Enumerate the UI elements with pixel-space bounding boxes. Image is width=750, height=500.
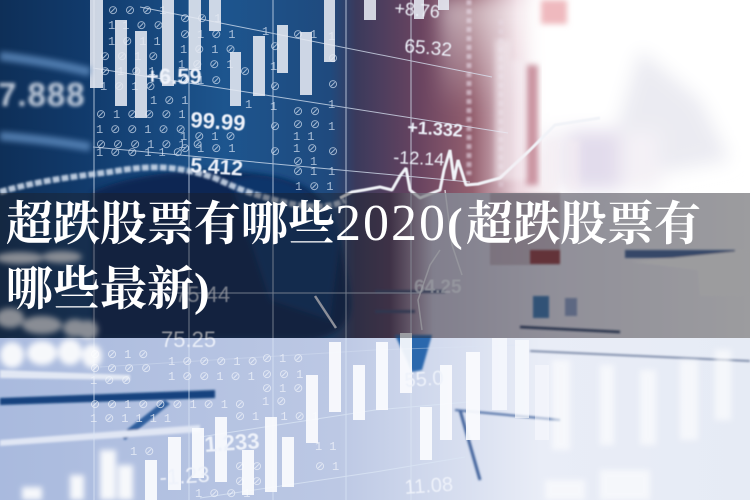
data numbers: -1.23 xyxy=(159,462,210,490)
binary digit columns upper: ⊘1⊘ xyxy=(180,74,228,88)
data numbers: +6.59 xyxy=(146,64,202,89)
binary digit columns upper: ⊘1 xyxy=(293,28,324,42)
blurred number at left: 7.888 xyxy=(0,76,86,113)
blurred red panel xyxy=(526,65,538,185)
binary digit columns upper: ⊘1⊘1 xyxy=(180,142,243,156)
binary digit columns upper: 11⊘⊘ xyxy=(108,19,171,33)
binary digits lower: ⊘⊘ xyxy=(235,475,269,489)
binary digits lower: ⊘⊘1⊘ xyxy=(90,348,155,362)
binary digits lower: 11 xyxy=(315,440,343,454)
binary digit columns upper: ⊘1⊘1 xyxy=(180,28,243,42)
binary digits lower: 1⊘ xyxy=(262,395,293,409)
title line 1: 超跌股票有哪些2020(超跌股票有 xyxy=(6,195,701,252)
title line 2: 哪些最新) xyxy=(6,264,210,316)
white translucent bars lower xyxy=(145,333,549,500)
binary digit columns upper: ⊘ xyxy=(270,145,287,159)
binary digit columns upper: 1 xyxy=(270,100,284,114)
binary digit columns upper: ⊘⊘ xyxy=(293,118,327,132)
binary digits lower: ⊘⊘ xyxy=(235,460,269,474)
title band xyxy=(0,193,750,338)
binary digit columns upper: ⊘⊘ xyxy=(293,105,327,119)
binary digit columns upper: 1 xyxy=(328,30,342,44)
binary digits lower: 1⊘⊘1⊘1 xyxy=(168,370,262,384)
binary digit columns upper: ⊘ xyxy=(270,40,287,54)
binary digit columns upper: ⊘1 xyxy=(293,155,324,169)
upper photo background xyxy=(0,0,750,340)
binary digits lower: 1⊘⊘ xyxy=(90,374,138,388)
data numbers: 55.0 xyxy=(404,367,444,392)
binary digit columns upper: 1 xyxy=(270,60,284,74)
blurred light streaks left xyxy=(0,56,90,147)
blue shapes on the lower desk xyxy=(0,335,750,480)
binary digit columns upper: ⊘ xyxy=(240,65,257,79)
binary digits lower: ⊘⊘1⊘⊘⊘1⊘1⊘ xyxy=(90,398,252,412)
binary digit columns upper: 11 xyxy=(293,130,321,144)
binary digits lower: 1⊘1111 xyxy=(90,412,178,426)
data numbers: 75.25 xyxy=(161,327,216,352)
data numbers: -12.14 xyxy=(393,147,445,170)
binary digit columns upper: 1 xyxy=(245,98,259,112)
blurred glowing circles lower left xyxy=(0,339,133,500)
binary digit columns upper: ⊘ xyxy=(328,145,345,159)
binary digits lower: ⊘⊘⊘⊘ xyxy=(90,362,158,376)
wavy white chart line left xyxy=(0,167,345,206)
zigzag chart line right xyxy=(340,118,600,330)
data numbers: +1.332 xyxy=(407,117,464,141)
binary digits lower xyxy=(90,348,346,500)
binary digit columns upper: 1 xyxy=(328,98,342,112)
lower right photo area xyxy=(390,193,750,340)
data numbers: 75.44 xyxy=(175,282,230,307)
binary digit columns upper: ⊘ xyxy=(328,52,345,66)
binary digit columns upper: ⊘⊘1⊘ xyxy=(100,50,165,64)
binary digit columns upper: ⊘ xyxy=(270,80,287,94)
binary digit columns upper: 1⊘ xyxy=(293,142,324,156)
pink haze fading down at top xyxy=(440,0,550,110)
binary digits lower: ⊘1⊘ xyxy=(262,352,310,366)
data numbers xyxy=(146,0,464,499)
binary digits lower: ⊘⊘1 xyxy=(262,368,310,382)
binary digit columns upper: 1 xyxy=(262,25,276,39)
binary digit columns upper: 1⊘⊘1⊘⊘ xyxy=(96,123,193,137)
binary digit columns upper: ⊘1 xyxy=(293,165,324,179)
binary digit column pink xyxy=(469,0,501,190)
binary digit columns upper: 1⊘11 xyxy=(108,35,168,49)
dark hand with pen xyxy=(92,171,350,340)
binary digit columns upper: 1⊘1⊘ xyxy=(100,80,163,94)
white haze at upper right xyxy=(530,0,750,190)
binary digit columns upper: ⊘ xyxy=(270,120,287,134)
data numbers: 64.25 xyxy=(414,277,462,298)
binary digits lower: ⊘1⊘ xyxy=(262,382,310,396)
binary digit columns upper: ⊘1⊘1 xyxy=(100,65,163,79)
binary digit columns upper: 1⊘1⊘ xyxy=(180,130,243,144)
binary digits lower: 1⊘⊘⊘1⊘ xyxy=(168,355,265,369)
data numbers: 1.233 xyxy=(204,428,260,457)
binary digit columns upper: 1⊘⊘1 xyxy=(178,58,241,72)
grid lines xyxy=(93,0,520,500)
binary digit columns upper: 1 xyxy=(328,165,342,179)
binary digit columns upper xyxy=(96,4,345,194)
lower right pale bars xyxy=(545,350,731,500)
data numbers: 5.412 xyxy=(190,154,244,181)
lower right photo details xyxy=(375,193,750,332)
blurred vertical bars at right of chart xyxy=(495,40,580,190)
binary digit columns upper: 1⊘1⊘ xyxy=(180,43,243,57)
binary digit columns upper: 1⊘1 xyxy=(295,180,340,194)
data numbers: 99.99 xyxy=(190,107,246,136)
binary digit columns upper: ⊘⊘⊘1⊘1⊘ xyxy=(96,138,210,152)
blurred circles above the lower desk xyxy=(0,251,98,340)
binary digit columns upper: ⊘⊘1 xyxy=(180,12,228,26)
binary digit columns upper: ⊘ xyxy=(328,78,345,92)
binary digit columns upper: 1⊘⊘11⊘ xyxy=(96,146,190,160)
blurred red bar xyxy=(541,0,567,24)
binary digit columns upper: ⊘1⊘⊘⊘1 xyxy=(96,108,193,122)
binary digit columns upper: 1 xyxy=(328,120,342,134)
data numbers: 11.08 xyxy=(404,474,454,499)
binary digits lower: ⊘1 1⊘1 xyxy=(235,410,326,424)
binary digit columns upper: ⊘⊘⊘1 xyxy=(108,4,173,18)
binary digits lower: 1⊘ xyxy=(130,445,161,459)
data numbers: 65.32 xyxy=(404,36,453,61)
lower desk background xyxy=(0,338,750,500)
binary digit columns upper: 1⊘1 xyxy=(150,94,195,108)
binary digits lower: ⊘1 xyxy=(315,460,346,474)
white translucent bars upper xyxy=(90,0,449,118)
